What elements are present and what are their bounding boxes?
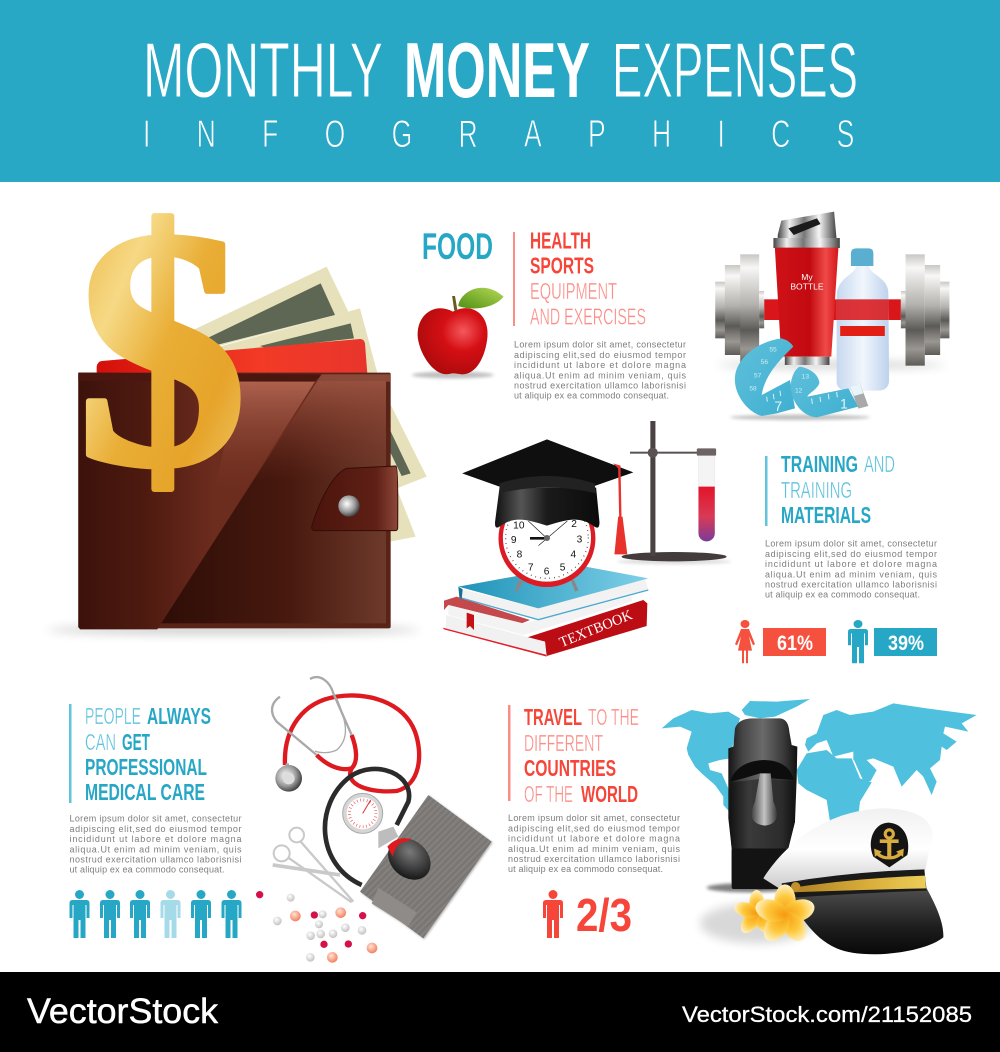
text block: travel: adipiscing elit,sed do eiusmod tempor <box>508 824 680 834</box>
red card <box>97 339 368 378</box>
text block: medical: ut aliquip ex ea commodo consequat. <box>70 865 224 875</box>
alarm clock: 10 <box>513 520 525 531</box>
text block: health sports: adipiscing elit,sed do eiusmod tempor <box>514 350 686 360</box>
text block: training: nostrud exercitation ullamco laborisnisi <box>765 580 937 590</box>
hat shadow <box>700 903 813 943</box>
shaker bottle <box>773 212 840 365</box>
footer banner: VectorStock <box>27 992 219 1031</box>
title: MONEY <box>404 26 590 114</box>
books: TEXTBOOK <box>557 607 635 651</box>
stat: men 39% <box>848 620 937 663</box>
panel: travel heading: OF THE <box>524 781 573 807</box>
dumbbell <box>715 254 949 366</box>
pump bulb <box>378 827 439 888</box>
subtitle: INFOGRAPHICS <box>143 113 854 156</box>
wallet body <box>78 373 391 628</box>
panel: travel heading: WORLD <box>581 781 638 807</box>
panel: travel heading: TO THE <box>588 704 639 730</box>
panel: medical heading: MEDICAL CARE <box>85 779 205 805</box>
text block: medical: nostrud exercitation ullamco laborisnisi <box>70 854 242 864</box>
panel: medical heading: ALWAYS <box>147 703 211 729</box>
text block: training: ut aliquip ex ea commodo consequat. <box>765 590 920 600</box>
measuring tape: 57 <box>754 372 762 379</box>
panel: medical heading: CAN <box>85 729 116 755</box>
illustration: stethoscope, blood pressure cuff, instruments and pills <box>256 677 492 963</box>
panel: training heading <box>765 451 895 528</box>
panel: travel heading: DIFFERENT <box>524 730 603 756</box>
text block: training: aliqua.Ut enim ad minim veniam, quis <box>765 569 938 579</box>
measuring tape: 13 <box>802 373 809 380</box>
wallet clasp <box>312 466 398 531</box>
panel: travel heading: TRAVEL <box>524 704 582 730</box>
text block: training: incididunt ut labore et dolore magna <box>765 559 937 569</box>
shaker bottle: My <box>801 273 814 282</box>
measuring tape: 56 <box>761 359 768 366</box>
lab stand <box>616 421 732 564</box>
text block: travel: Lorem ipsum dolor sit amet, consectetur <box>508 813 680 823</box>
black tube <box>325 769 409 885</box>
text block: medical: incididunt ut labore et dolore magna <box>70 834 241 844</box>
banknotes <box>186 267 427 542</box>
dollar sign: $ <box>77 159 247 537</box>
text block: health sports <box>514 340 686 401</box>
title <box>143 26 858 114</box>
measuring tape: 7 <box>774 398 782 414</box>
panel: medical heading: GET <box>122 729 150 755</box>
text block: health sports: Lorem ipsum dolor sit amet, consectetur <box>514 340 686 350</box>
stethoscope chest piece <box>275 765 302 792</box>
pressure cuff <box>360 795 492 938</box>
header banner <box>0 0 1000 182</box>
books <box>443 565 648 657</box>
alarm clock: 7 <box>528 562 534 573</box>
text block: medical: Lorem ipsum dolor sit amet, consectetur <box>70 814 242 824</box>
text block: medical: adipiscing elit,sed do eiusmod tempor <box>70 824 242 834</box>
text block: health sports: incididunt ut labore et dolore magna <box>514 360 686 370</box>
wallet flap <box>78 373 322 629</box>
measuring tape: 58 <box>749 386 757 393</box>
panel: training heading: MATERIALS <box>781 502 871 528</box>
illustration: dumbbell, shaker, bottle and tape <box>715 212 949 420</box>
text block: travel: ut aliquip ex ea commodo consequat. <box>508 864 663 874</box>
pressure gauge <box>343 793 383 833</box>
graduation cap <box>462 439 633 554</box>
panel: medical heading: PROFESSIONAL <box>85 754 207 780</box>
floor shadow <box>717 362 946 368</box>
footer banner <box>0 972 1000 1052</box>
illustration: graduation cap, clock, books and test tube <box>443 421 732 657</box>
panel: health sports heading: HEALTH <box>530 228 591 254</box>
measuring tape <box>730 338 870 420</box>
panel: medical heading: PEOPLE <box>85 703 141 729</box>
water bottle <box>837 248 889 391</box>
footer banner: VectorStock.com/21152085 <box>682 1002 972 1027</box>
stat: women 61% <box>735 620 826 663</box>
alarm clock <box>498 490 595 592</box>
alarm clock: 8 <box>517 550 523 561</box>
world map <box>662 699 977 822</box>
text block: training: Lorem ipsum dolor sit amet, consectetur <box>765 538 937 548</box>
wallet shadow <box>47 625 420 635</box>
panel: training heading: TRAINING <box>781 451 858 477</box>
stat: women 61%: 61% <box>777 632 813 655</box>
text block: health sports: aliqua.Ut enim ad minim veniam, quis <box>514 370 686 380</box>
measuring tape: 55 <box>769 347 777 354</box>
surgical clamp <box>273 828 353 902</box>
test tube <box>697 448 716 541</box>
text block: health sports: ut aliquip ex ea commodo consequat. <box>514 391 669 401</box>
text block: medical <box>70 814 242 875</box>
panel: training heading: AND <box>864 451 895 477</box>
panel: health sports heading: SPORTS <box>530 252 594 278</box>
shaker bottle: BOTTLE <box>790 283 824 291</box>
alarm clock: 6 <box>544 567 550 578</box>
text block: travel: aliqua.Ut enim ad minim veniam, quis <box>508 844 680 854</box>
alarm clock: 5 <box>560 562 566 573</box>
icon: apple <box>412 288 504 378</box>
panel: health sports heading: EQUIPMENT <box>530 278 617 304</box>
text block: travel: nostrud exercitation ullamco laborisnisi <box>508 854 680 864</box>
plumeria flowers <box>732 884 817 946</box>
panel: training heading: TRAINING <box>781 477 852 503</box>
stat: men 39%: 39% <box>888 632 924 655</box>
panel: travel heading: COUNTRIES <box>524 755 616 781</box>
illustration: wallet with dollar sign <box>47 159 427 635</box>
stat: two thirds: 2/3 <box>576 889 632 941</box>
title: MONTHLY <box>143 26 383 114</box>
measuring tape: 12 <box>795 388 803 395</box>
panel: health sports heading: AND EXERCISES <box>530 304 646 330</box>
text block: travel: incididunt ut labore et dolore magna <box>508 834 680 844</box>
measuring tape: 1 <box>840 395 848 411</box>
alarm clock: 3 <box>577 534 583 545</box>
text block: training <box>765 538 938 600</box>
moai statue <box>707 718 797 892</box>
stat: row of six people <box>70 890 242 938</box>
alarm clock: 4 <box>571 550 577 561</box>
panel: medical heading <box>69 703 211 805</box>
text block: training: adipiscing elit,sed do eiusmod tempor <box>765 549 937 559</box>
text block: travel <box>508 813 680 874</box>
alarm clock: 9 <box>511 535 517 546</box>
illustration: world map, moai and captain hat <box>662 699 977 954</box>
captain hat <box>763 808 943 954</box>
stat: two thirds <box>543 889 632 941</box>
pills <box>256 891 377 963</box>
alarm clock: 2 <box>571 519 577 530</box>
stethoscope <box>272 677 419 791</box>
panel: travel heading <box>508 704 639 807</box>
text block: health sports: nostrud exercitation ullamco laborisnisi <box>514 380 686 390</box>
heading: food: FOOD <box>422 226 493 267</box>
panel: health sports heading <box>513 228 646 330</box>
anchor badge: ⚓ <box>871 820 907 868</box>
text block: medical: aliqua.Ut enim ad minim veniam, quis <box>70 844 242 854</box>
